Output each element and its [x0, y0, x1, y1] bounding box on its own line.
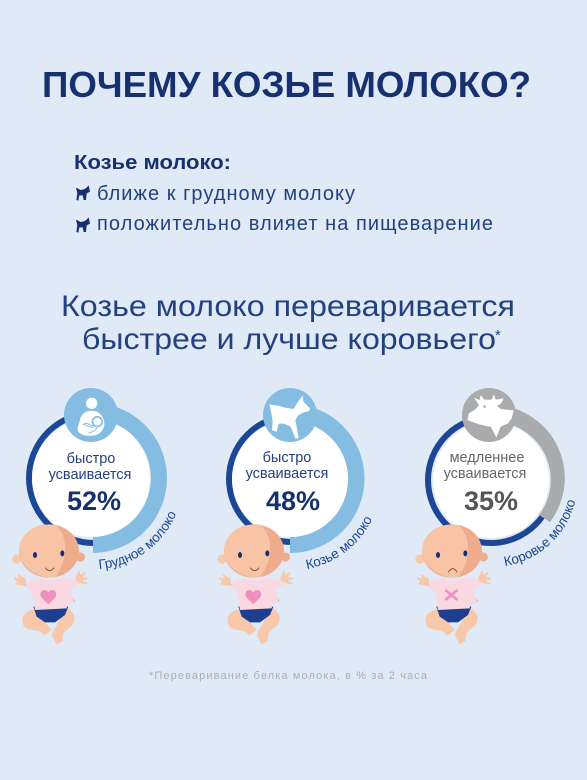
percentage: 35% [464, 486, 518, 516]
icon: goat bullet 1 [76, 185, 90, 201]
bullet text 1: ближе к грудному молоку [97, 183, 355, 205]
label text: быстро [67, 451, 115, 467]
percentage: 52% [67, 486, 121, 516]
dark ring [29, 413, 159, 543]
panel: breast milk: усваивается [49, 467, 131, 483]
icon circle: cow [462, 388, 516, 442]
white disc [232, 421, 348, 537]
gray arc 35% [489, 405, 565, 522]
baby 1 [12, 524, 87, 644]
benefits list [74, 152, 493, 235]
panel: cow milk: усваивается [444, 466, 526, 482]
label text: быстро [263, 450, 311, 466]
icon circle: breastfeeding [64, 388, 118, 442]
subtitle: Козье молоко переваривается [61, 290, 515, 323]
curved label: Коровье молоко [504, 500, 575, 566]
baby 3 [415, 524, 490, 644]
icon circle: goat [263, 388, 317, 442]
panel: goat milk: усваивается [246, 466, 328, 482]
bullet text 2: положительно влияет на пищеварение [97, 213, 493, 235]
panel: breast milk [26, 388, 176, 571]
list heading: Козье молоко: [74, 152, 231, 174]
percentage: 48% [266, 486, 320, 516]
panel: cow milk [425, 388, 575, 566]
panel: goat milk [226, 388, 372, 569]
light arc 52% [91, 403, 167, 553]
icon: goat bullet 2 [76, 217, 90, 233]
light arc 48% [290, 404, 364, 553]
footnote: *Переваривание белка молока, в % за 2 часа [149, 670, 428, 682]
title: ПОЧЕМУ КОЗЬЕ МОЛОКО? [42, 64, 531, 105]
label text: медленнее [450, 450, 524, 466]
white disc [32, 419, 150, 537]
curved label: Грудное молоко [99, 512, 176, 571]
dark ring [229, 416, 355, 542]
white disc [433, 422, 549, 538]
subtitle: * [495, 327, 501, 344]
subtitle [61, 290, 515, 356]
baby 2 [217, 524, 292, 644]
subtitle: быстрее и лучше коровьего [82, 323, 496, 356]
curved label: Козье молоко [306, 517, 372, 569]
dark ring [428, 417, 554, 543]
